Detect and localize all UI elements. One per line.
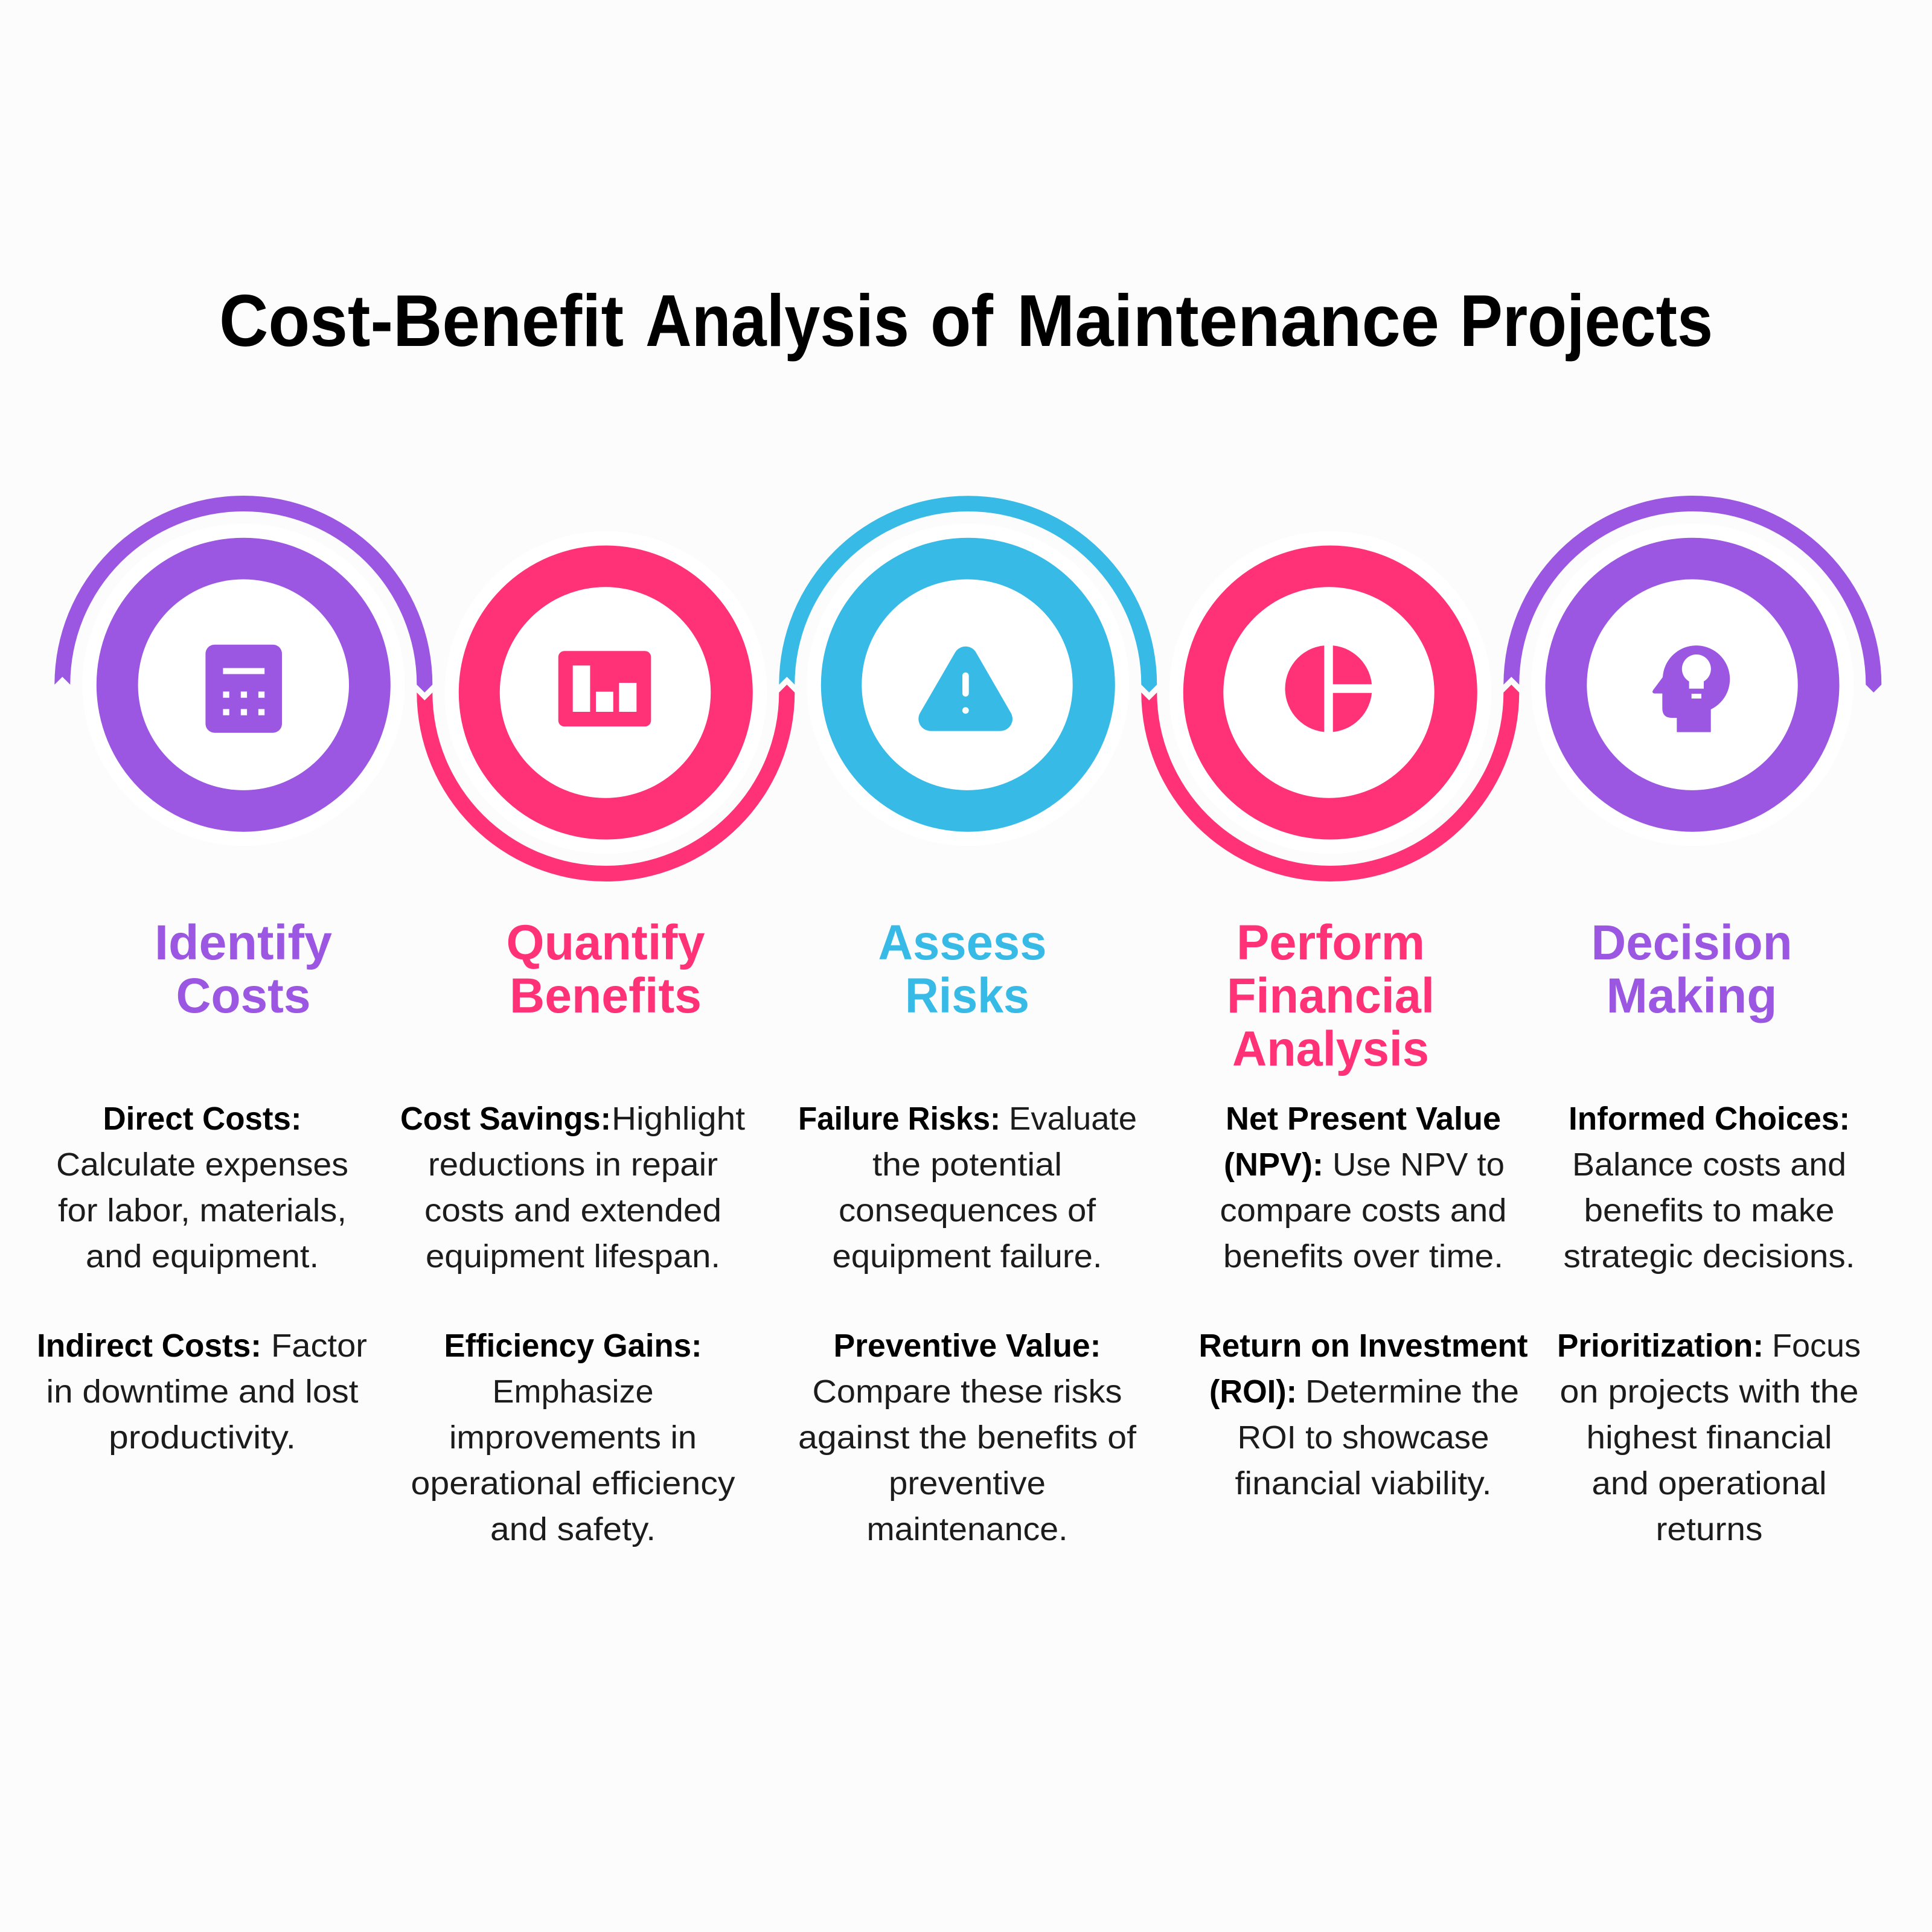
text block: cost savings (400, 1101, 745, 1275)
text block: return on investment: (ROI): (1209, 1374, 1297, 1410)
text block: informed choices: strategic decisions. (1564, 1238, 1855, 1275)
heading: identify costs: Identify (155, 915, 332, 970)
text block: informed choices (1564, 1101, 1855, 1275)
heading: quantify benefits: Benefits (510, 968, 702, 1023)
text block: efficiency gains: Efficiency Gains: (444, 1328, 702, 1364)
arc ribbon: perform financial analysis (1141, 685, 1519, 881)
text block: return on investment: financial viability. (1235, 1465, 1491, 1502)
text block: net present value: compare costs and (1220, 1192, 1507, 1229)
text block: failure risks: Failure Risks: (798, 1101, 1000, 1137)
text block: preventive value: Compare these risks (813, 1374, 1122, 1410)
arc ribbon: quantify benefits (417, 685, 795, 881)
heading: assess risks: Assess (878, 915, 1047, 970)
text block: efficiency gains: Emphasize (493, 1374, 653, 1410)
text block: informed choices: Informed Choices: (1569, 1101, 1850, 1137)
icon: warning triangle (930, 659, 1000, 719)
text block: prioritization: highest financial (1587, 1419, 1832, 1456)
text block: preventive value: against the benefits of (798, 1419, 1137, 1456)
text block: failure risks (798, 1101, 1137, 1275)
text block: failure risks: equipment failure. (832, 1238, 1102, 1275)
panel: perform financial analysis (1141, 531, 1528, 1502)
text block: net present value: Net Present Value (1226, 1101, 1501, 1137)
text block: preventive value: preventive (889, 1465, 1046, 1502)
panel: identify costs (37, 496, 432, 1456)
icon: pie chart (1285, 640, 1376, 738)
heading: decision making (1591, 915, 1792, 1023)
text block: prioritization (1557, 1328, 1861, 1547)
text block: indirect costs: Factor (271, 1328, 367, 1364)
text block: cost savings: Cost Savings: (400, 1101, 611, 1137)
text block: informed choices: benefits to make (1584, 1192, 1834, 1229)
text block: return on investment (1199, 1328, 1528, 1502)
arc ribbon: identify costs (54, 496, 432, 693)
icon: calculator (205, 645, 282, 733)
heading: perform financial analysis: Analysis (1232, 1022, 1429, 1076)
ring: assess risks (807, 523, 1129, 846)
text block: indirect costs: productivity. (109, 1419, 296, 1456)
text block: net present value: Use NPV to (1332, 1147, 1505, 1183)
icon: bar chart (558, 651, 651, 726)
ring: decision making (1531, 523, 1854, 846)
text block: efficiency gains (411, 1328, 735, 1547)
panel: assess risks (779, 496, 1157, 1547)
text block: direct costs: and equipment. (86, 1238, 319, 1275)
text block: efficiency gains: improvements in (449, 1419, 697, 1456)
heading: quantify benefits (506, 915, 705, 1023)
text block: net present value: benefits over time. (1223, 1238, 1503, 1275)
text block: prioritization: Focus (1772, 1328, 1861, 1364)
text block: failure risks: Evaluate (1009, 1101, 1137, 1137)
text block: informed choices: Balance costs and (1572, 1147, 1846, 1183)
text block: cost savings: equipment lifespan. (426, 1238, 720, 1275)
text block: prioritization: on projects with the (1560, 1374, 1858, 1410)
title: of (930, 280, 993, 362)
text block: efficiency gains: and safety. (490, 1511, 656, 1547)
text block: failure risks: consequences of (839, 1192, 1096, 1229)
title: Projects (1460, 280, 1713, 362)
title: Cost-Benefit (219, 280, 624, 362)
text block: preventive value: Preventive Value: (833, 1328, 1101, 1364)
heading: identify costs (155, 915, 332, 1023)
title: Maintenance (1017, 280, 1439, 362)
text block: direct costs: Direct Costs: (103, 1101, 302, 1137)
text block: direct costs: Calculate expenses (56, 1147, 348, 1183)
title (219, 280, 1713, 362)
text block: cost savings: costs and extended (424, 1192, 721, 1229)
text block: direct costs: for labor, materials, (58, 1192, 347, 1229)
heading: quantify benefits: Quantify (506, 915, 705, 970)
text block: efficiency gains: operational efficiency (411, 1465, 735, 1502)
heading: assess risks: Risks (905, 968, 1029, 1023)
text block: direct costs (56, 1101, 348, 1275)
text block: failure risks: the potential (872, 1147, 1062, 1183)
ring: perform financial analysis (1169, 531, 1491, 854)
heading: identify costs: Costs (176, 968, 310, 1023)
heading: decision making: Making (1606, 968, 1777, 1023)
text block: prioritization: and operational (1591, 1465, 1827, 1502)
heading: perform financial analysis: Financial (1227, 968, 1435, 1023)
text block: indirect costs: in downtime and lost (46, 1374, 359, 1410)
heading: perform financial analysis: Perform (1236, 915, 1425, 970)
text block: cost savings: Highlight (612, 1101, 745, 1137)
heading: assess risks (878, 915, 1047, 1023)
text block: indirect costs: Indirect Costs: (37, 1328, 261, 1364)
text block: indirect costs (37, 1328, 367, 1456)
title: Analysis (645, 280, 909, 362)
panel: decision making (1503, 496, 1881, 1547)
arc ribbon: decision making (1503, 496, 1881, 693)
text block: prioritization: Prioritization: (1557, 1328, 1764, 1364)
text block: return on investment: Return on Investment (1199, 1328, 1528, 1364)
heading: perform financial analysis (1227, 915, 1435, 1076)
ring: quantify benefits (444, 531, 767, 854)
text block: preventive value (798, 1328, 1137, 1547)
text block: prioritization: returns (1655, 1511, 1763, 1547)
panel: quantify benefits (400, 531, 795, 1547)
heading: decision making: Decision (1591, 915, 1792, 970)
text block: return on investment: Determine the (1305, 1374, 1519, 1410)
arc ribbon: assess risks (779, 496, 1157, 693)
icon: head with lightbulb (1652, 645, 1730, 732)
text block: net present value: (NPV): (1224, 1147, 1323, 1183)
text block: net present value (1220, 1101, 1507, 1275)
ring: identify costs (82, 523, 405, 846)
text block: preventive value: maintenance. (867, 1511, 1067, 1547)
text block: return on investment: ROI to showcase (1238, 1419, 1489, 1456)
text block: cost savings: reductions in repair (428, 1147, 718, 1183)
